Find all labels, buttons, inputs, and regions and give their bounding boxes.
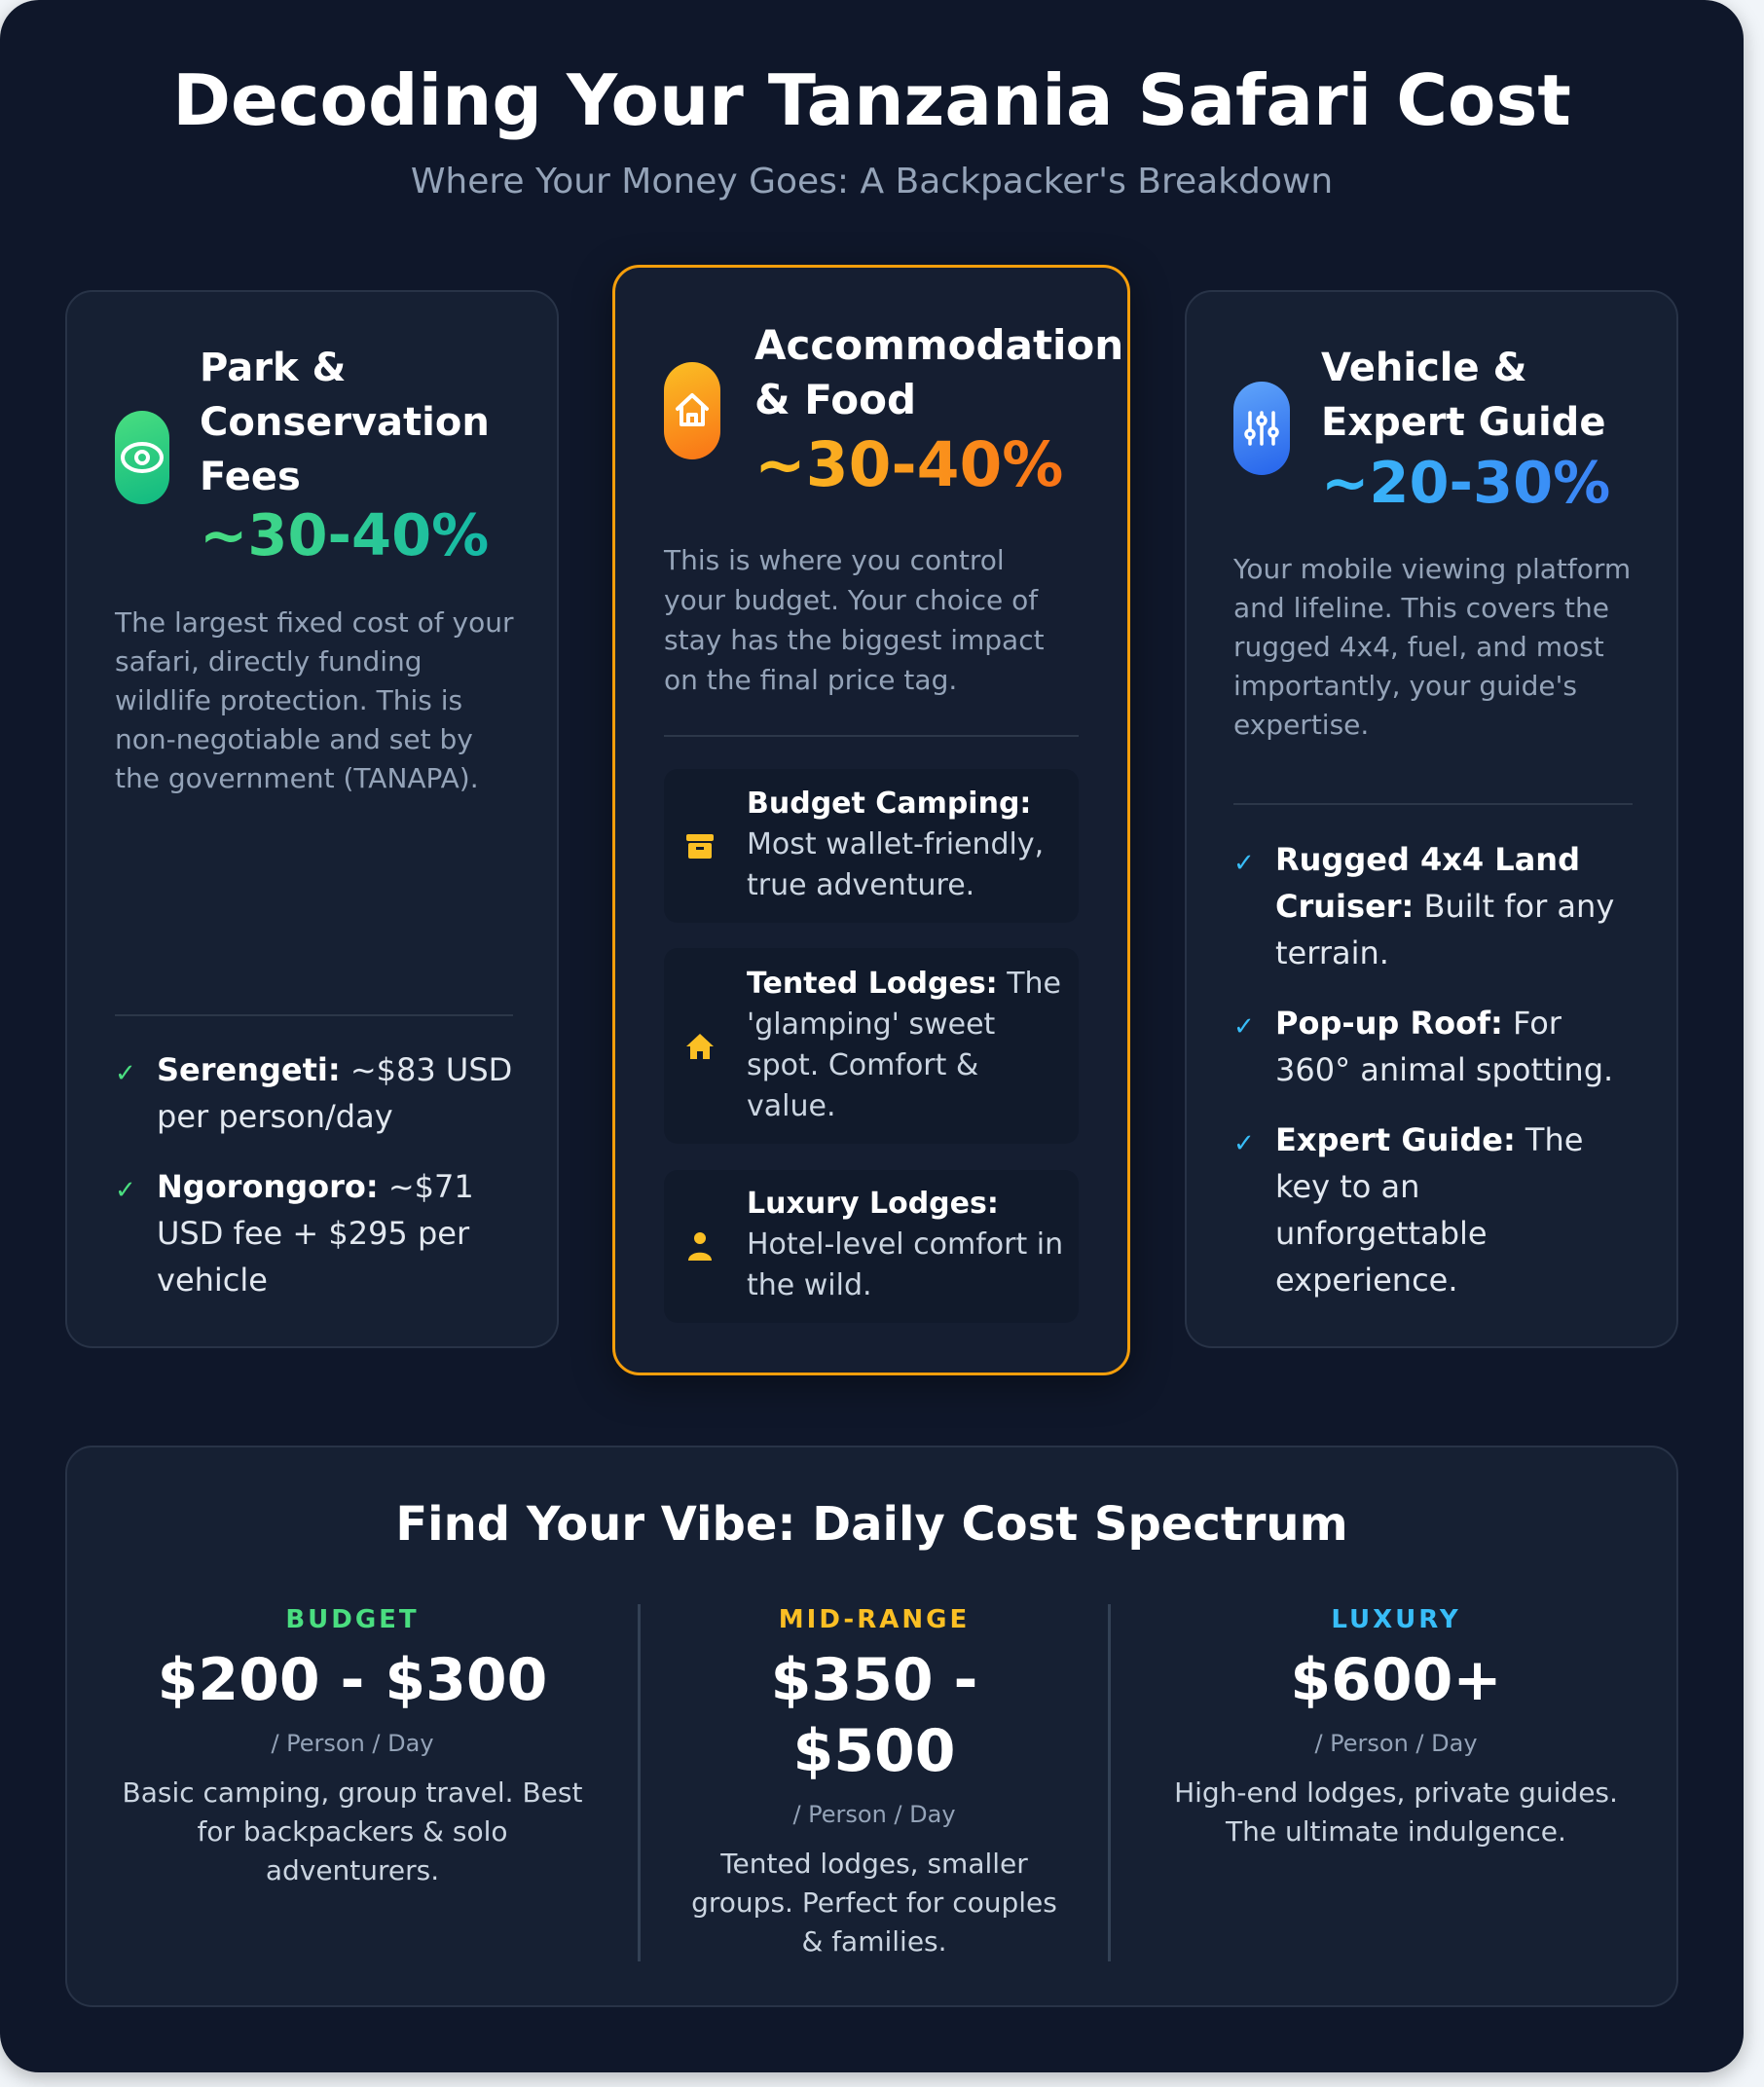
list: fees [115, 1051, 512, 1299]
heading [754, 321, 1123, 423]
icon: sliders [1233, 382, 1290, 475]
panel: vehicle [1185, 290, 1678, 1348]
heading [1321, 346, 1605, 445]
heading: Accommodation [754, 321, 1123, 369]
item: land cruiser: Rugged 4x4 Land Cruiser: Built for any terrain. [1275, 841, 1614, 971]
item: expert guide: ✓ [1233, 1129, 1255, 1158]
heading: Park & [200, 346, 346, 390]
heading: Conservation [200, 400, 490, 445]
description: Your mobile viewing platform and lifeline. This covers the rugged 4x4, fuel, and most importantly, your guide's expertise. [1233, 553, 1631, 741]
icon: person [688, 1232, 712, 1261]
panel: daily cost spectrum [65, 1446, 1678, 2007]
item: ngorongoro: ✓ [115, 1176, 136, 1205]
option: tented lodges: Tented Lodges: The 'glamping' sweet spot. Comfort & value. [747, 967, 1061, 1123]
option: budget camping [664, 769, 1079, 923]
column: mid-range: Tented lodges, smaller groups. Perfect for couples & families. [691, 1848, 1057, 1958]
icon: box [686, 834, 714, 859]
column: budget: Basic camping, group travel. Best for backpackers & solo adventurers. [123, 1776, 582, 1886]
column: budget: / Person / Day [271, 1730, 434, 1757]
option: budget camping: Budget Camping: Most wallet-friendly, true adventure. [747, 787, 1044, 902]
description: The largest fixed cost of your safari, directly funding wildlife protection. This is non-negotiable and set by the government (TANAPA). [115, 606, 514, 794]
item: land cruiser: ✓ [1233, 849, 1255, 878]
heading: Fees [200, 455, 301, 499]
heading: & Food [754, 376, 916, 423]
subtitle: Where Your Money Goes: A Backpacker's Breakdown [411, 162, 1333, 201]
panel: park fees [65, 290, 559, 1348]
item: pop-up roof: Pop-up Roof: For 360° animal spotting. [1275, 1005, 1613, 1088]
option: luxury lodges [664, 1170, 1079, 1323]
icon: eye [115, 411, 169, 504]
heading: Expert Guide [1321, 400, 1605, 445]
item: serengeti: ✓ [115, 1059, 136, 1088]
heading [200, 346, 490, 499]
percent: ~30-40% [200, 501, 489, 568]
heading: Find Your Vibe: Daily Cost Spectrum [395, 1497, 1348, 1552]
icon: house [686, 1034, 714, 1059]
column: mid-range: / Person / Day [792, 1801, 956, 1828]
column: budget [123, 1605, 582, 1886]
column: luxury: LUXURY [1331, 1605, 1461, 1634]
item: expert guide: Expert Guide: The key to an unforgettable experience. [1275, 1121, 1583, 1299]
column: mid-range: MID-RANGE [779, 1605, 970, 1634]
column: luxury: / Person / Day [1314, 1730, 1478, 1757]
heading: Vehicle & [1321, 346, 1526, 390]
column: luxury: High-end lodges, private guides. The ultimate indulgence. [1174, 1776, 1618, 1848]
icon: house [664, 362, 720, 459]
title: Decoding Your Tanzania Safari Cost [172, 59, 1571, 141]
column: luxury: $600+ [1290, 1646, 1502, 1714]
list: vehicle features [1233, 841, 1614, 1299]
column: budget: BUDGET [285, 1605, 420, 1634]
percent: ~20-30% [1321, 449, 1610, 516]
percent: ~30-40% [754, 429, 1063, 500]
option: tented lodges [664, 948, 1079, 1144]
column: mid-range: $350 - $500 [771, 1646, 977, 1785]
option: luxury lodges: Luxury Lodges: Hotel-level comfort in the wild. [747, 1187, 1063, 1302]
panel: accommodation [612, 265, 1130, 1375]
column: luxury [1174, 1605, 1618, 1848]
item: pop-up roof: ✓ [1233, 1012, 1255, 1042]
column: mid-range [691, 1605, 1057, 1958]
column: budget: $200 - $300 [158, 1646, 547, 1714]
item: ngorongoro: Ngorongoro: ~$71 USD fee + $295 per vehicle [157, 1168, 474, 1299]
description: This is where you control your budget. Your choice of stay has the biggest impact on the final price tag. [664, 544, 1045, 696]
item: serengeti: Serengeti: ~$83 USD per person/day [157, 1051, 512, 1135]
